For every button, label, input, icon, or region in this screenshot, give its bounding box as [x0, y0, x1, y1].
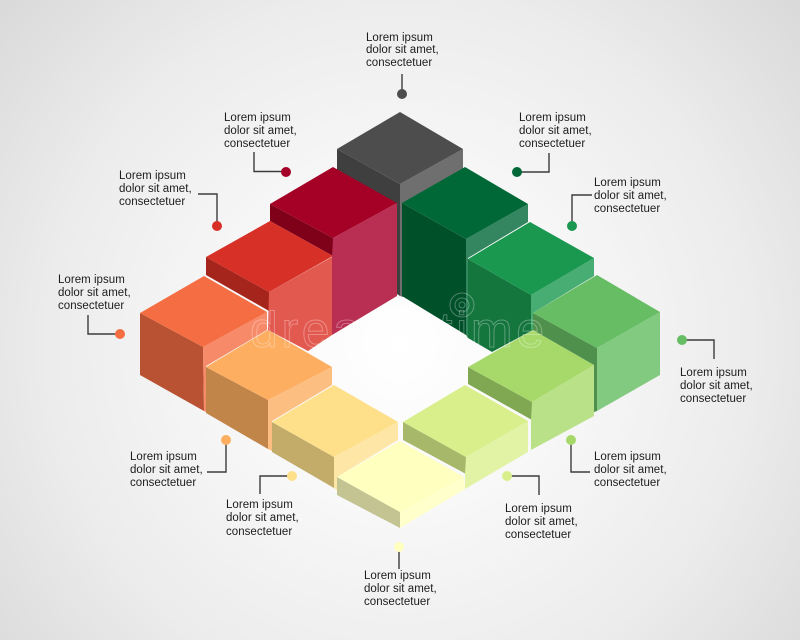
- block: pale yellow: [337, 441, 465, 528]
- callout: green: consectetuer: [594, 203, 660, 215]
- block: light lime: [403, 385, 528, 489]
- callout: orange: [58, 274, 131, 339]
- callout: light lime: [502, 471, 578, 541]
- block: orange: [140, 276, 267, 412]
- callout: light lime: dolor sit amet,: [505, 516, 578, 528]
- callout: dark green: consectetuer: [519, 138, 585, 150]
- callout: red: Lorem ipsum: [119, 170, 186, 182]
- callout: lime: [566, 435, 667, 489]
- callout: light lime: Lorem ipsum: [505, 503, 572, 515]
- callout: yellow orange: Lorem ipsum: [226, 499, 293, 511]
- callout: orange: Lorem ipsum: [58, 274, 125, 286]
- callout: pale yellow: consectetuer: [364, 596, 430, 608]
- callout: medium green: dolor sit amet,: [680, 380, 753, 392]
- callout: dark red: dolor sit amet,: [224, 125, 297, 137]
- callout: lime: Lorem ipsum: [594, 451, 661, 463]
- block: medium green: [533, 275, 660, 412]
- block: red: [206, 221, 333, 351]
- callout: dark red: [224, 112, 297, 177]
- callout: yellow orange: consectetuer: [226, 526, 292, 538]
- callout: pale yellow: Lorem ipsum: [364, 570, 431, 582]
- callout: red: consectetuer: [119, 196, 185, 208]
- block: green: [468, 222, 594, 352]
- callout: dark green: dolor sit amet,: [519, 125, 592, 137]
- callout: lime: dolor sit amet,: [594, 464, 667, 476]
- callout: pale yellow: [364, 542, 437, 608]
- callout: green: dolor sit amet,: [594, 190, 667, 202]
- callout: medium green: [677, 335, 753, 405]
- callout: red: [119, 170, 222, 231]
- block: dark green: [402, 167, 528, 338]
- callout: green: Lorem ipsum: [594, 177, 661, 189]
- callout: medium green: consectetuer: [680, 393, 746, 405]
- callout: yellow orange: dolor sit amet,: [226, 512, 299, 524]
- callout: lime: consectetuer: [594, 477, 660, 489]
- callout: red: dolor sit amet,: [119, 183, 192, 195]
- callout: light orange: consectetuer: [130, 477, 196, 489]
- callout: dark red: Lorem ipsum: [224, 112, 291, 124]
- block: light orange: [206, 330, 332, 451]
- callout: light orange: Lorem ipsum: [130, 451, 197, 463]
- block: dark red: [270, 167, 397, 335]
- block: lime: [468, 330, 594, 450]
- callout: light orange: [130, 435, 231, 489]
- callout: medium green: Lorem ipsum: [680, 367, 747, 379]
- callout: dark green: Lorem ipsum: [519, 112, 586, 124]
- callout: light lime: consectetuer: [505, 529, 571, 541]
- callout: orange: dolor sit amet,: [58, 287, 131, 299]
- callout: dark green: [512, 112, 592, 177]
- callout: pale yellow: dolor sit amet,: [364, 583, 437, 595]
- callout: gray top: Lorem ipsum: [366, 32, 433, 44]
- callout: green: [567, 177, 667, 231]
- callout: gray top: [366, 32, 439, 99]
- watermark: dreamstime: [250, 302, 545, 358]
- block: yellow orange: [272, 385, 398, 490]
- block: gray: [337, 112, 463, 297]
- callout: yellow orange: [226, 471, 299, 538]
- callout: orange: consectetuer: [58, 300, 124, 312]
- callout: dark red: consectetuer: [224, 138, 290, 150]
- callout: light orange: dolor sit amet,: [130, 464, 203, 476]
- callout: gray top: dolor sit amet,: [366, 44, 439, 56]
- callout: gray top: consectetuer: [366, 57, 432, 69]
